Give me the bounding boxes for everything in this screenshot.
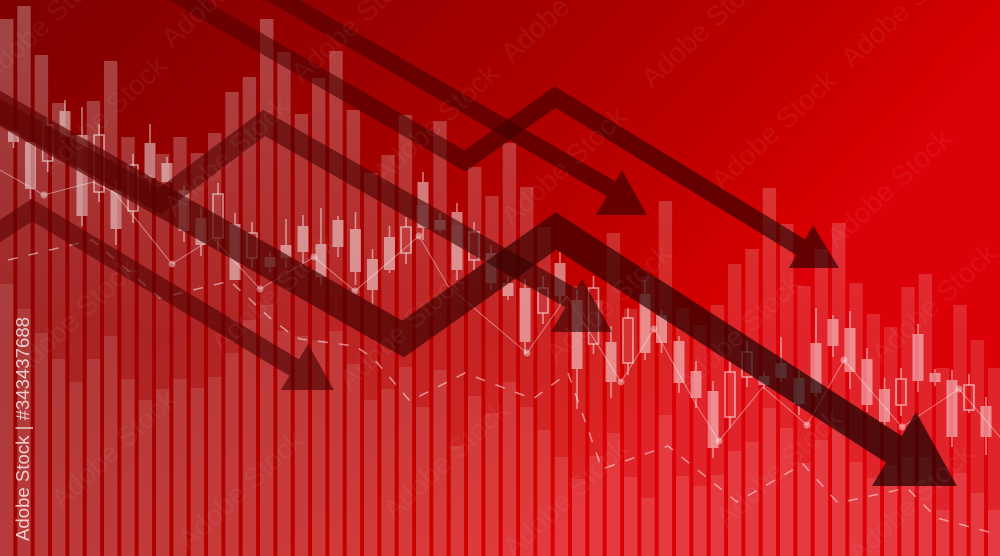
- arrow: lower left short arrow: [0, 210, 334, 390]
- solid price line with nodes: [0, 170, 1000, 445]
- vertical stock id text: Adobe Stock | #343437688: [12, 317, 33, 541]
- watermark: repeated stock text: Adobe Stock: [333, 264, 471, 396]
- watermark: repeated stock text: Adobe Stock: [205, 227, 343, 359]
- watermark: repeated stock text: Adobe Stock: [705, 64, 843, 196]
- watermark: repeated stock text: Adobe Stock: [670, 267, 808, 399]
- watermark: repeated stock text: Adobe Stock: [35, 49, 173, 181]
- arrow: large main falling arrow: [0, 97, 957, 486]
- watermark: repeated stock text: Adobe Stock: [377, 394, 515, 526]
- watermark: repeated stock text: Adobe Stock: [172, 424, 310, 556]
- watermark: repeated stock text: Adobe Stock: [495, 100, 633, 232]
- watermark: repeated stock text: Adobe Stock: [367, 57, 505, 189]
- watermark: repeated stock text: Adobe Stock: [158, 90, 296, 222]
- watermark: repeated stock text: Adobe Stock: [45, 383, 183, 515]
- arrow: middle zigzag arrow: [0, 100, 612, 332]
- watermark: repeated stock text: Adobe Stock: [540, 237, 678, 369]
- candlestick chart: [8, 100, 992, 458]
- watermark: repeated stock text: Adobe Stock: [865, 237, 1000, 369]
- bar chart: lower lighter volume bars: [0, 284, 1000, 556]
- dashed price line: [8, 240, 1000, 535]
- watermark: repeated stock text: Adobe Stock: [820, 122, 958, 254]
- arrow: upper zigzag arrow: [138, 0, 839, 268]
- arrow: upper short falling arrow: [250, 0, 647, 215]
- watermark: repeated stock text: Adobe Stock: [710, 402, 848, 534]
- watermark: repeated stock text: Adobe Stock: [5, 252, 143, 384]
